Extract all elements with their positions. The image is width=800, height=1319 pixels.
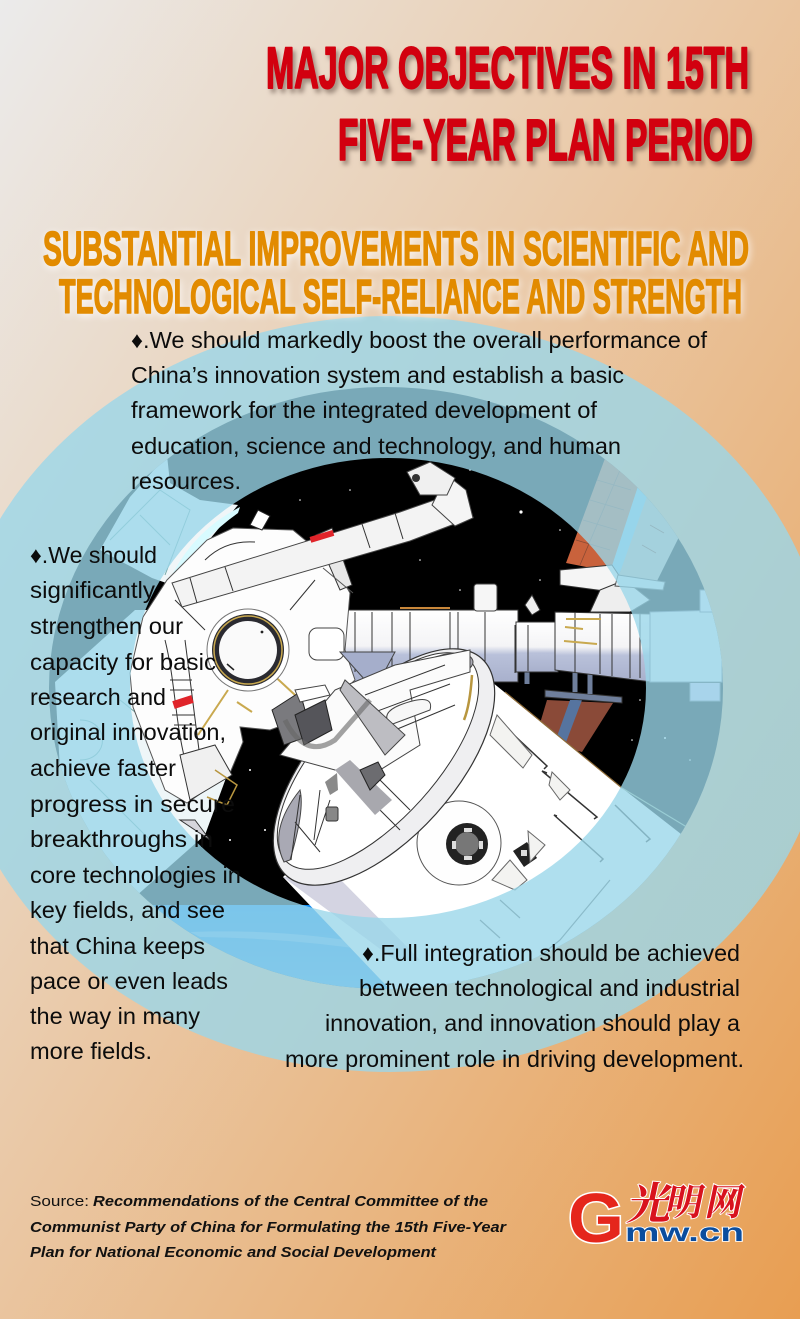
horizontal truss module: [340, 584, 722, 701]
logo: gmw.cn: 光: [623, 1169, 681, 1232]
text block: innovation system: framework for the integrated development of: [131, 397, 598, 423]
lower-left ghost wing: [55, 455, 240, 897]
logo: gmw.cn: [568, 1169, 750, 1257]
source note: Source:: [30, 1193, 89, 1210]
top-left glow: [173, 507, 240, 573]
text block: basic research: capacity for basic: [30, 649, 216, 675]
text block: integration: [285, 940, 744, 1072]
logo: gmw.cn: mw.cn: [625, 1217, 744, 1247]
text block: basic research: original innovation,: [30, 719, 226, 745]
title: [266, 36, 753, 173]
stars: [229, 469, 691, 841]
source note: Plan for National Economic and Social Development: [30, 1244, 437, 1261]
solar panels lower: [527, 668, 622, 752]
logo: gmw.cn: 网: [702, 1172, 750, 1226]
text block: basic research: ♦.We should: [30, 542, 157, 568]
hub: [130, 510, 395, 840]
text block: innovation system: [131, 327, 708, 494]
text block: innovation system: ♦.We should markedly boost the overall performance of: [131, 327, 708, 353]
text block: basic research: significantly: [30, 577, 156, 603]
earth: [152, 905, 599, 989]
text block: integration: innovation, and innovation should play a: [325, 1010, 740, 1036]
window ring: [207, 609, 289, 691]
source note: Recommendations of the Central Committee of the: [93, 1193, 488, 1210]
text block: basic research: pace or even leads: [30, 968, 228, 994]
solar panels upper: [560, 453, 680, 612]
text block: innovation system: China’s innovation system and establish a basic: [131, 362, 624, 388]
text block: basic research: strengthen our: [30, 613, 183, 639]
text block: basic research: that China keeps: [30, 933, 205, 959]
translucent teal ring overlay: [0, 316, 800, 1072]
text block: innovation system: resources.: [131, 468, 241, 494]
logo: gmw.cn: 明: [662, 1172, 710, 1226]
text block: basic research: more fields.: [30, 1038, 152, 1064]
text block: basic research: breakthroughs in: [30, 826, 213, 852]
robotic arm top: [172, 462, 473, 607]
docking mechanism: [272, 650, 470, 821]
text block: innovation system: education, science and technology, and human: [131, 433, 621, 459]
text block: basic research: achieve faster: [30, 755, 176, 781]
text block: basic research: progress in secure: [30, 791, 235, 817]
text block: integration: more prominent role in driving development.: [285, 1046, 744, 1072]
text block: basic research: research and: [30, 684, 166, 710]
text block: basic research: the way in many: [30, 1003, 200, 1029]
large white module: [283, 684, 686, 989]
text block: basic research: [30, 542, 241, 1064]
source note: [30, 1193, 507, 1261]
logo: gmw.cn: G: [568, 1179, 624, 1257]
illustration: space station inside oval: [40, 380, 740, 1005]
section heading: [43, 223, 749, 324]
source note: Communist Party of China for Formulating the 15th Five-Year: [30, 1219, 507, 1236]
text block: basic research: core technologies in: [30, 862, 241, 888]
text block: integration: ♦.Full integration should be achieved: [362, 940, 740, 966]
module ring: [272, 648, 496, 886]
text block: integration: between technological and industrial: [359, 975, 740, 1001]
text block: basic research: key fields, and see: [30, 897, 225, 923]
